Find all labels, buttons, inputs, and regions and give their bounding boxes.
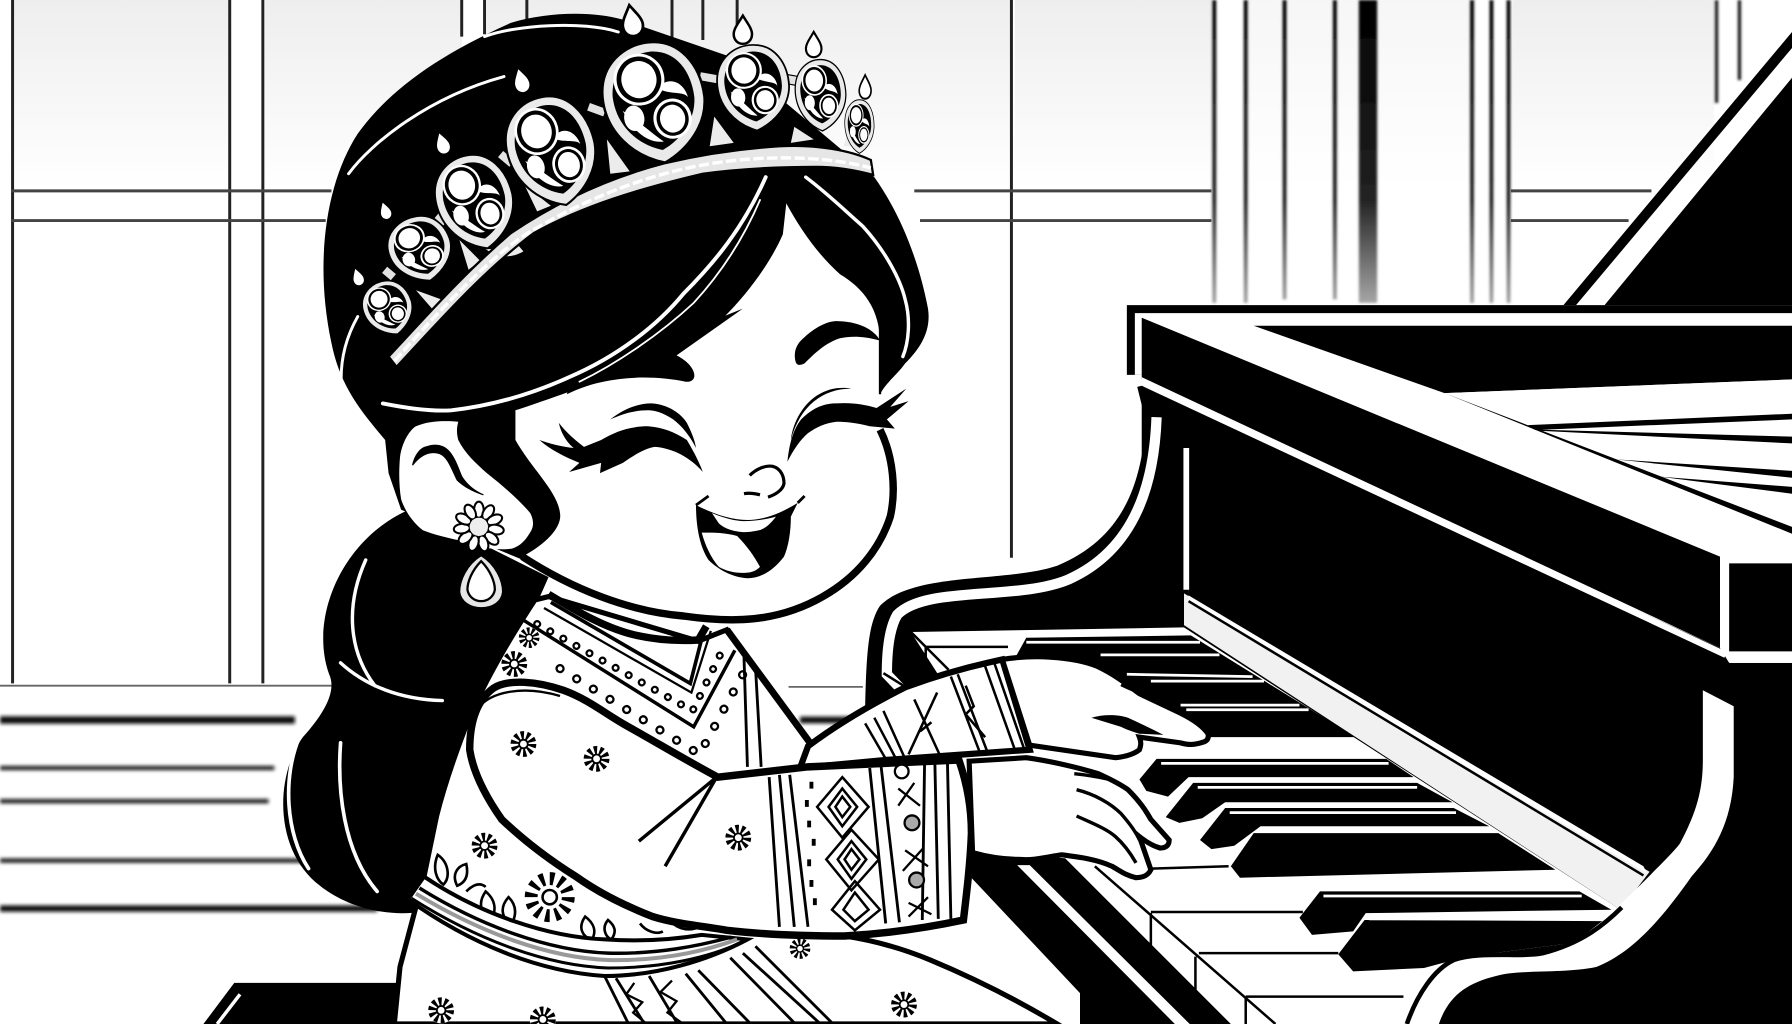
piano: right box [1729, 563, 1792, 651]
front arm: rosettes [471, 731, 751, 859]
earring: flower [453, 502, 504, 552]
dress: skirt panel [605, 946, 833, 1024]
piano: fallboard and case [1142, 377, 1792, 1024]
bench [203, 983, 402, 1024]
back arm [800, 657, 1208, 768]
piano: top rim [1127, 305, 1792, 663]
tiara: drops [349, 3, 871, 288]
dress: neck line [549, 594, 706, 640]
tiara: drapes [416, 117, 857, 309]
front arm: hand [969, 758, 1169, 878]
window frames [11, 0, 1739, 683]
piano: lid dark panel [1254, 326, 1792, 393]
tiara: band [389, 146, 873, 367]
face: outline [522, 430, 893, 620]
front arm: sleeve folds [639, 777, 717, 866]
tiara: connectors [381, 72, 800, 281]
piano: key bed corner lines [883, 632, 1008, 690]
piano: strings [1445, 379, 1792, 534]
piano: lower side [970, 851, 1231, 1024]
back arm: hand [1002, 657, 1208, 758]
front arm: patterned cuff [769, 761, 951, 930]
piano: key highlights [1026, 642, 1609, 919]
face [515, 203, 909, 620]
front arm [470, 682, 1169, 936]
earring: drop [459, 555, 503, 608]
piano: left cheek [865, 386, 1189, 743]
face: left closed eye [539, 403, 703, 473]
piano: fallboard highlight [1184, 448, 1189, 590]
floor lines [0, 686, 863, 909]
tiara [349, 3, 874, 367]
ear [399, 421, 533, 549]
dress: floral embroidery [435, 855, 697, 939]
piano: right cheek band [1407, 690, 1734, 1024]
piano: black keys [1015, 635, 1611, 971]
hair: highlights [341, 25, 618, 400]
dress: torso and skirt [394, 594, 1057, 1024]
earring [453, 502, 504, 608]
face: mouth [696, 496, 805, 578]
piano: key bed [911, 627, 1621, 1024]
piano [865, 32, 1792, 1024]
face: left eyebrow [567, 309, 743, 394]
dress: large flower [524, 871, 575, 923]
tiara: jewels [356, 34, 874, 342]
dress: collar [522, 602, 813, 767]
hair: ponytail [283, 509, 549, 913]
front arm: sleeve [470, 682, 971, 936]
face: right closed eye [787, 388, 909, 462]
hair: head [323, 14, 929, 566]
face: right eyebrow [795, 321, 880, 365]
face: nose [744, 466, 784, 497]
back arm: cuff pattern [865, 663, 1024, 759]
dress: skirt rosettes [428, 938, 917, 1024]
dress: sash [408, 877, 747, 976]
hair: fringe strands [383, 177, 908, 411]
piano: white strip [1184, 592, 1650, 910]
piano: white key lines [1095, 866, 1403, 1024]
piano: raised lid [1563, 32, 1792, 305]
dress: collar rosettes [501, 627, 540, 677]
